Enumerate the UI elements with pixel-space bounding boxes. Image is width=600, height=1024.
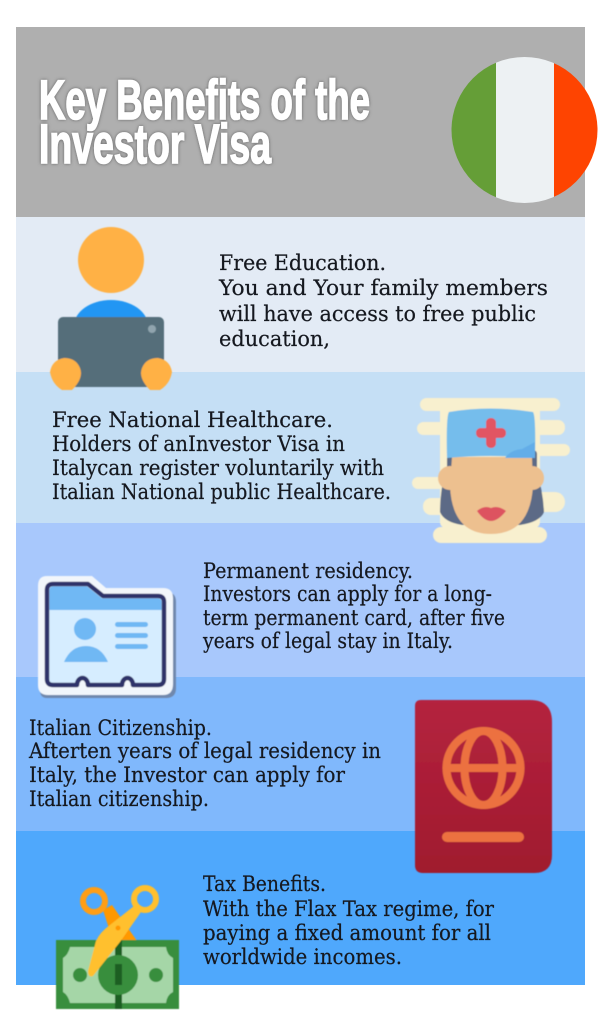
text: free national healthcare: Italycan register voluntarily with bbox=[52, 456, 384, 480]
text: italian citizenship: Italian Citizenship. bbox=[29, 716, 212, 740]
title bbox=[39, 68, 370, 175]
text: italian citizenship bbox=[28, 716, 381, 811]
panel: italian citizenship bbox=[16, 677, 585, 831]
text: permanent residency: years of legal stay in Italy. bbox=[202, 629, 453, 653]
title: Key Benefits of the bbox=[39, 68, 370, 131]
text: free national healthcare: Italian National public Healthcare. bbox=[52, 480, 391, 504]
text: tax benefits: With the Flax Tax regime, for bbox=[203, 897, 495, 921]
icon: person with tablet bbox=[50, 227, 172, 390]
text: tax benefits: worldwide incomes. bbox=[203, 945, 402, 969]
text: free education: will have access to free public bbox=[219, 302, 536, 326]
icon: scissors cutting money bbox=[56, 888, 179, 1009]
text: tax benefits bbox=[203, 872, 495, 969]
icon: passport bbox=[415, 700, 552, 873]
text: free education bbox=[218, 251, 548, 351]
panel: permanent residency bbox=[16, 523, 585, 677]
text: permanent residency: Permanent residency. bbox=[203, 559, 413, 583]
title: Investor Visa bbox=[39, 112, 272, 175]
panel: free education bbox=[16, 217, 585, 372]
text: free national healthcare: Holders of anInvestor Visa in bbox=[52, 432, 345, 456]
text: permanent residency: term permanent card, after five bbox=[203, 606, 505, 630]
text: permanent residency bbox=[202, 559, 505, 653]
text: free education: education, bbox=[219, 327, 330, 351]
text: italian citizenship: Italy, the Investor can apply for bbox=[29, 763, 346, 787]
text: free education: You and Your family members bbox=[218, 276, 548, 300]
text: tax benefits: paying a fixed amount for all bbox=[203, 921, 491, 945]
icon: italian flag bbox=[450, 55, 599, 205]
icon: id folder bbox=[38, 576, 176, 698]
text: permanent residency: Investors can apply for a long- bbox=[203, 582, 492, 606]
icon: nurse bbox=[412, 398, 570, 543]
panel: free national healthcare bbox=[16, 372, 585, 523]
text: free national healthcare: Free National Healthcare. bbox=[52, 408, 333, 432]
panel: header bbox=[16, 27, 585, 217]
text: tax benefits: Tax Benefits. bbox=[203, 872, 326, 896]
text: italian citizenship: Afterten years of legal residency in bbox=[28, 739, 381, 763]
panel: tax benefits bbox=[16, 831, 585, 985]
text: italian citizenship: Italian citizenship. bbox=[29, 787, 209, 811]
text: free education: Free Education. bbox=[219, 251, 386, 275]
text: free national healthcare bbox=[52, 408, 391, 504]
